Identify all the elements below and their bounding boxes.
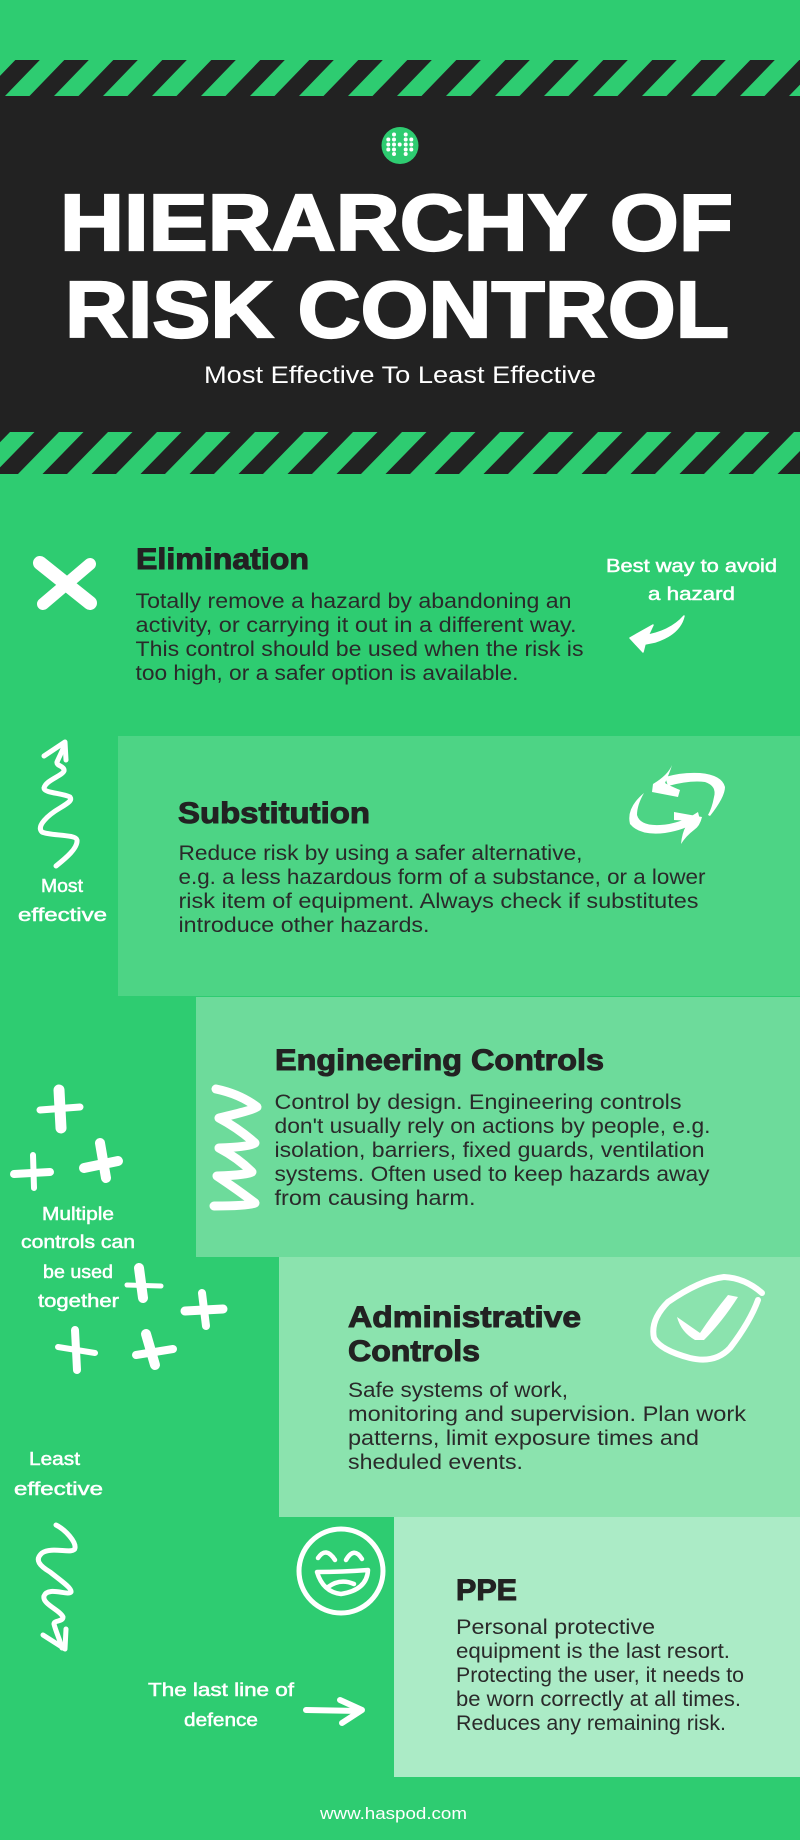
icon: plus signs <box>14 1090 223 1370</box>
icon: check in circle <box>653 1277 762 1360</box>
title: HIERARCHY OF <box>60 178 733 267</box>
label: least effective: effective <box>14 1479 103 1499</box>
text: PPE description <box>456 1616 744 1735</box>
title: RISK CONTROL <box>65 265 729 354</box>
text: administrative description: monitoring and supervision. Plan work <box>348 1403 747 1426</box>
label: multiple controls can be used together: Multiple <box>42 1204 114 1224</box>
text: PPE description: equipment is the last resort. <box>456 1640 730 1663</box>
title <box>60 178 733 354</box>
text: administrative description: patterns, limit exposure times and <box>348 1427 699 1450</box>
text: substitution description: risk item of equipment. Always check if substitutes <box>178 890 698 913</box>
label: least effective: Least <box>29 1449 80 1469</box>
label: the last line of defence: defence <box>184 1710 258 1730</box>
text: engineering description: don't usually rely on actions by people, e.g. <box>274 1115 710 1138</box>
panel: elimination <box>136 543 584 685</box>
text: administrative description <box>348 1379 747 1474</box>
icon: swap arrows <box>629 765 725 844</box>
header banner <box>0 60 800 474</box>
heading: engineering controls: Engineering Controls <box>275 1044 604 1077</box>
text: substitution description <box>178 842 706 937</box>
subtitle: Most Effective To Least Effective <box>204 362 596 389</box>
text: PPE description: Protecting the user, it needs to <box>456 1664 744 1687</box>
arrow: curved to elimination <box>630 616 684 652</box>
heading: elimination: Elimination <box>136 543 309 576</box>
arrow: most effective squiggle <box>40 742 77 866</box>
heading: administrative controls: Controls <box>348 1335 480 1368</box>
label: multiple controls can be used together: together <box>38 1291 119 1311</box>
text: elimination description: This control should be used when the risk is <box>136 638 584 661</box>
text: substitution description: Reduce risk by using a safer alternative, <box>178 842 582 865</box>
icon: smiley <box>299 1529 383 1613</box>
icon: logo <box>382 127 418 164</box>
callout: best way to avoid a hazard: Best way to avoid <box>606 556 777 576</box>
text: elimination description <box>136 590 584 685</box>
arrow: to PPE <box>306 1700 362 1723</box>
label: multiple controls can be used together: be used <box>43 1262 113 1282</box>
text: elimination description: Totally remove a hazard by abandoning an <box>136 590 572 613</box>
label: most effective: effective <box>18 905 107 925</box>
text: substitution description: introduce other hazards. <box>178 914 430 937</box>
text: elimination description: activity, or carrying it out in a different way. <box>136 614 576 637</box>
footer: website: www.haspod.com <box>319 1804 467 1823</box>
text: engineering description <box>274 1091 710 1210</box>
panel: engineering controls <box>196 997 800 1257</box>
panel: substitution <box>118 736 800 996</box>
text: PPE description: Personal protective <box>456 1616 655 1639</box>
label: the last line of defence <box>148 1680 295 1730</box>
heading: administrative controls: Administrative <box>348 1301 581 1334</box>
icon: zigzag <box>214 1089 257 1206</box>
text: engineering description: isolation, barriers, fixed guards, ventilation <box>274 1139 704 1162</box>
heading: administrative controls <box>348 1301 581 1368</box>
callout: best way to avoid a hazard: a hazard <box>648 584 735 604</box>
label: multiple controls can be used together <box>21 1204 135 1311</box>
text: administrative description: Safe systems of work, <box>348 1379 568 1402</box>
text: engineering description: from causing harm. <box>274 1187 476 1210</box>
arrow: least effective squiggle <box>38 1525 75 1649</box>
label: most effective <box>18 876 107 925</box>
panel: PPE <box>394 1517 800 1777</box>
heading: substitution: Substitution <box>178 797 370 830</box>
text: PPE description: be worn correctly at all times. <box>456 1688 741 1711</box>
text: engineering description: systems. Often used to keep hazards away <box>274 1163 710 1186</box>
label: least effective <box>14 1449 103 1499</box>
heading: PPE: PPE <box>456 1574 517 1607</box>
text: substitution description: e.g. a less hazardous form of a substance, or a lower <box>178 866 706 889</box>
icon: cross <box>40 563 90 604</box>
text: PPE description: Reduces any remaining risk. <box>456 1712 726 1735</box>
panel: administrative controls <box>279 1257 800 1517</box>
text: administrative description: sheduled events. <box>348 1451 523 1474</box>
label: most effective: Most <box>41 876 83 896</box>
text: elimination description: too high, or a safer option is available. <box>136 662 518 685</box>
callout: best way to avoid a hazard <box>606 556 777 604</box>
label: multiple controls can be used together: controls can <box>21 1232 135 1252</box>
label: the last line of defence: The last line of <box>148 1680 295 1700</box>
text: engineering description: Control by design. Engineering controls <box>274 1091 682 1114</box>
